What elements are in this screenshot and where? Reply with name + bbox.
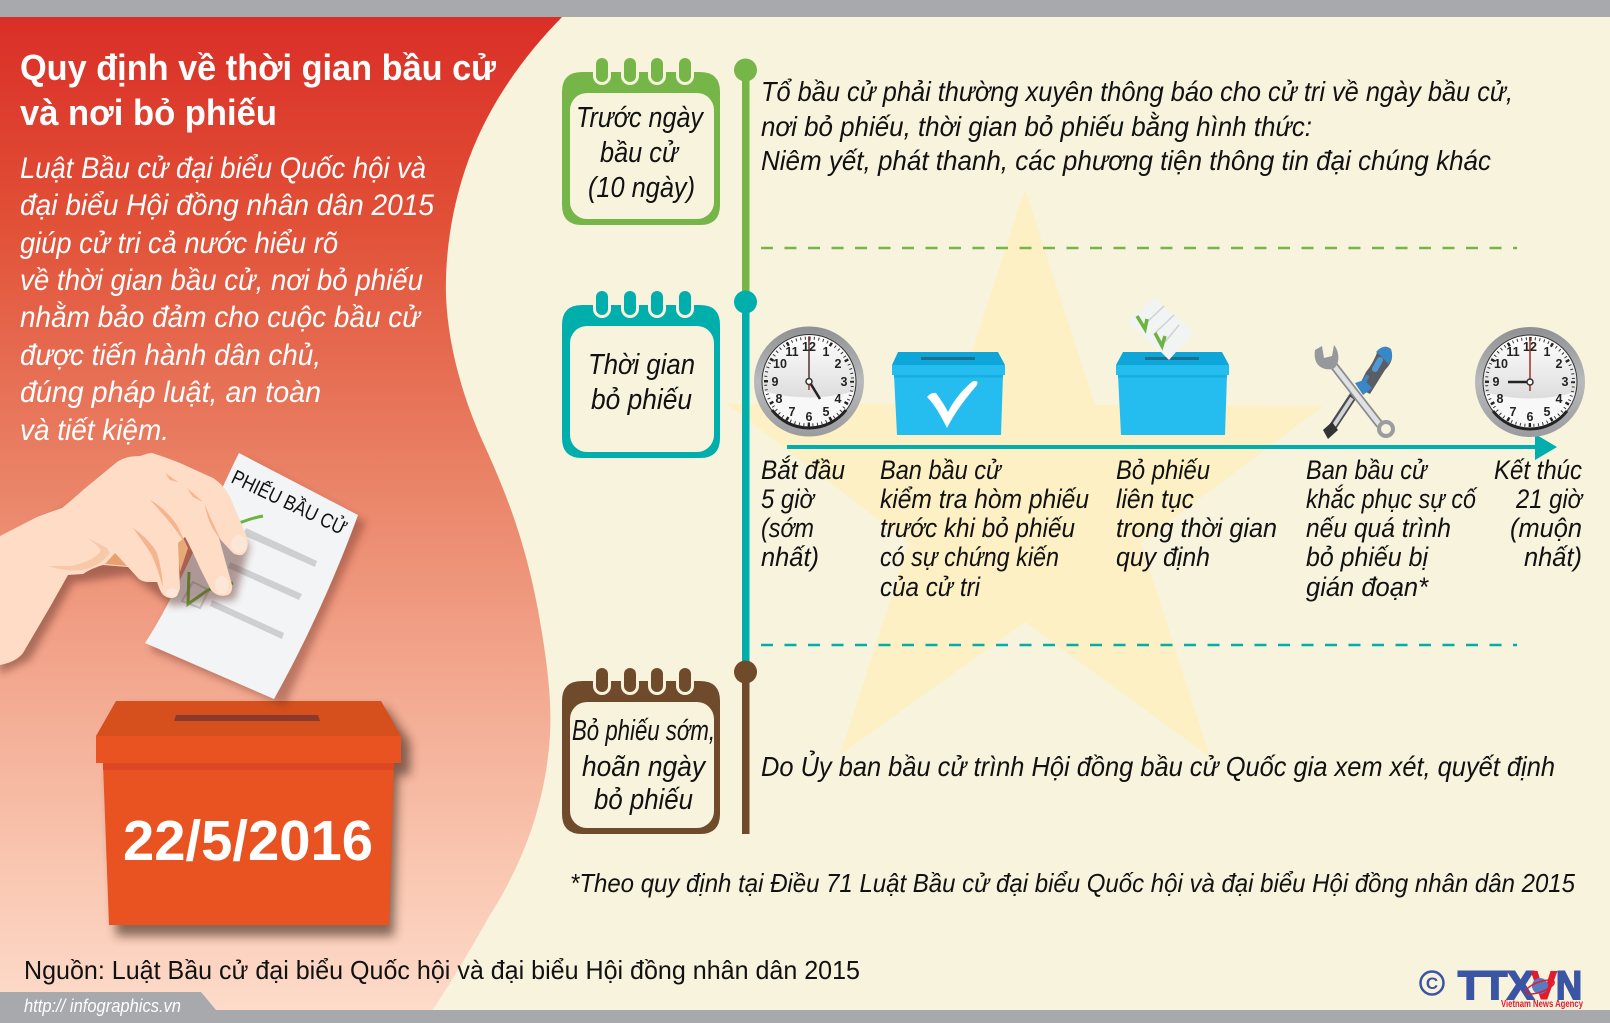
- intro text block: và tiết kiệm.: [20, 414, 169, 447]
- calendar: voting time: Thời gian: [588, 349, 695, 381]
- icon: ballot paper: PHIẾU BẦU CỬ: [228, 465, 351, 540]
- logo: TTXVN: N: [1556, 964, 1582, 1008]
- icon: clock 9 pm: 6: [1527, 410, 1534, 424]
- logo: TTXVN: Vietnam News Agency: [1501, 999, 1583, 1010]
- label: fix interruption: Ban bầu cử: [1306, 455, 1429, 485]
- icon: ballot in blue box: [1116, 298, 1229, 435]
- label: start time: Bắt đầu: [761, 454, 845, 485]
- label: continuous voting: Bỏ phiếu: [1116, 455, 1210, 485]
- title: Quy định về thời gian bầu cử: [20, 47, 497, 88]
- icon: clock 9 pm: 10: [1494, 357, 1508, 371]
- icon: clock 5 am: 7: [789, 405, 796, 419]
- intro text block: Luật Bầu cử đại biểu Quốc hội và: [20, 152, 426, 185]
- icon: ballot paper: [145, 453, 366, 706]
- icon: clock 5 am: [754, 326, 864, 436]
- icon: clock 9 pm: 7: [1510, 405, 1517, 419]
- icon: orange ballot box: [96, 701, 410, 936]
- icon: blue ballot box with check: [892, 352, 1005, 435]
- logo: TTXVN: [1420, 964, 1583, 1010]
- label: inspect ballot box: trước khi bỏ phiếu: [880, 513, 1075, 543]
- label: inspect ballot box: kiểm tra hòm phiếu: [880, 484, 1089, 514]
- icon: clock 5 am: 2: [835, 357, 842, 371]
- logo: TTXVN: V: [1531, 964, 1557, 1008]
- text block: notification before election: Tổ bầu cử phải thường xuyên thông báo cho cử tri về ngày bầu cử,: [761, 76, 1513, 107]
- intro text block: về thời gian bầu cử, nơi bỏ phiếu: [20, 264, 423, 297]
- label: continuous voting: [1116, 455, 1277, 572]
- wrench: [1315, 345, 1393, 436]
- icon: clock 9 pm: 12: [1523, 340, 1537, 354]
- calendar: early voting or postponement: [562, 668, 720, 834]
- icon: wrench and screwdriver: [1315, 345, 1393, 439]
- icon: clock 5 am: 4: [835, 392, 842, 406]
- url tab: [0, 992, 216, 1016]
- label: start time: 5 giờ: [761, 484, 816, 514]
- intro text block: nhằm bảo đảm cho cuộc bầu cử: [20, 301, 422, 334]
- label: end time: nhất): [1524, 542, 1582, 572]
- panel: left red curved background: [0, 17, 562, 1012]
- label: start time: (sớm: [761, 513, 814, 543]
- logo: TTXVN: TTX: [1458, 964, 1534, 1008]
- label: fix interruption: gián đoạn*: [1306, 572, 1429, 602]
- calendar: before election day: bầu cử: [600, 137, 680, 169]
- timeline: teal segment: [734, 290, 757, 662]
- bottom bar: [0, 1010, 1610, 1023]
- icon: clock 5 am: 11: [785, 345, 799, 359]
- source line: Nguồn: Luật Bầu cử đại biểu Quốc hội và đại biểu Hội đồng nhân dân 2015: [24, 955, 860, 985]
- url tab: http:// infographics.vn: [24, 996, 181, 1016]
- label: fix interruption: [1306, 455, 1478, 602]
- label: inspect ballot box: Ban bầu cử: [880, 455, 1003, 485]
- calendar: before election day: [562, 58, 720, 225]
- icon: clock 9 pm: 1: [1544, 345, 1551, 359]
- decorative star: [727, 189, 1323, 757]
- icon: clock 5 am: 1: [823, 345, 830, 359]
- icon: clock 5 am: 6: [806, 410, 813, 424]
- icon: clock 9 pm: 3: [1562, 375, 1569, 389]
- label: end time: 21 giờ: [1515, 484, 1584, 514]
- title: [20, 47, 497, 133]
- text block: notification before election: Niêm yết, phát thanh, các phương tiện thông tin đại chúng khác: [761, 145, 1491, 176]
- icon: clock 5 am: 12: [802, 340, 816, 354]
- intro text block: đại biểu Hội đồng nhân dân 2015: [20, 189, 434, 222]
- date on box: 22/5/2016: [123, 809, 373, 873]
- logo: TTXVN: C: [1426, 974, 1438, 993]
- label: fix interruption: khắc phục sự cố: [1306, 483, 1478, 514]
- text block: early voting decision: Do Ủy ban bầu cử trình Hội đồng bầu cử Quốc gia xem xét, quyết định: [761, 749, 1555, 782]
- icon: clock 9 pm: 11: [1506, 345, 1520, 359]
- calendar: before election day: (10 ngày): [588, 172, 695, 204]
- label: fix interruption: bỏ phiếu bị: [1306, 542, 1429, 572]
- icon: clock 5 am: 10: [773, 357, 787, 371]
- label: fix interruption: nếu quá trình: [1306, 513, 1451, 543]
- icon: clock 9 pm: 2: [1556, 357, 1563, 371]
- arrow: voting day timeline: [787, 434, 1557, 460]
- intro text block: đúng pháp luật, an toàn: [20, 376, 321, 409]
- label: continuous voting: trong thời gian: [1116, 513, 1277, 543]
- icon: clock 5 am: 3: [841, 375, 848, 389]
- label: end time: Kết thúc: [1494, 455, 1582, 485]
- icon: clock 5 am: 5: [823, 405, 830, 419]
- calendar: early voting or postponement: bỏ phiếu: [594, 784, 693, 816]
- label: inspect ballot box: [880, 455, 1089, 602]
- icon: clock 5 am: 9: [772, 375, 779, 389]
- label: inspect ballot box: có sự chứng kiến: [880, 542, 1059, 572]
- calendar: early voting or postponement: hoãn ngày: [582, 751, 706, 783]
- calendar: voting time: bỏ phiếu: [591, 384, 692, 416]
- label: end time: (muộn: [1510, 513, 1582, 543]
- timeline: brown segment: [734, 660, 757, 834]
- top bar: [0, 0, 1610, 17]
- icon: clock 9 pm: 5: [1544, 405, 1551, 419]
- label: continuous voting: quy định: [1116, 542, 1210, 572]
- text block: notification before election: [761, 76, 1513, 176]
- label: start time: nhất): [761, 542, 819, 572]
- icon: clock 9 pm: [1475, 327, 1585, 437]
- label: end time: [1494, 455, 1584, 572]
- title: và nơi bỏ phiếu: [20, 92, 277, 133]
- text block: notification before election: nơi bỏ phiếu, thời gian bỏ phiếu bằng hình thức:: [761, 111, 1312, 142]
- label: start time: [761, 454, 845, 572]
- intro text block: được tiến hành dân chủ,: [20, 339, 321, 372]
- timeline: green segment: [734, 58, 757, 302]
- icon: clock 5 am: 8: [776, 392, 783, 406]
- icon: hand: [0, 453, 250, 674]
- label: inspect ballot box: của cử tri: [880, 572, 981, 602]
- intro text block: giúp cử tri cả nước hiểu rõ: [20, 227, 338, 260]
- icon: clock 9 pm: 4: [1556, 392, 1563, 406]
- calendar: before election day: Trước ngày: [576, 102, 704, 134]
- label: continuous voting: liên tục: [1116, 484, 1194, 514]
- icon: clock 9 pm: 8: [1497, 392, 1504, 406]
- screwdriver: [1323, 347, 1392, 439]
- intro text block: [20, 152, 434, 447]
- calendar: voting time: [562, 291, 720, 458]
- calendar: early voting or postponement: Bỏ phiếu sớm,: [572, 715, 715, 747]
- icon: clock 9 pm: 9: [1493, 375, 1500, 389]
